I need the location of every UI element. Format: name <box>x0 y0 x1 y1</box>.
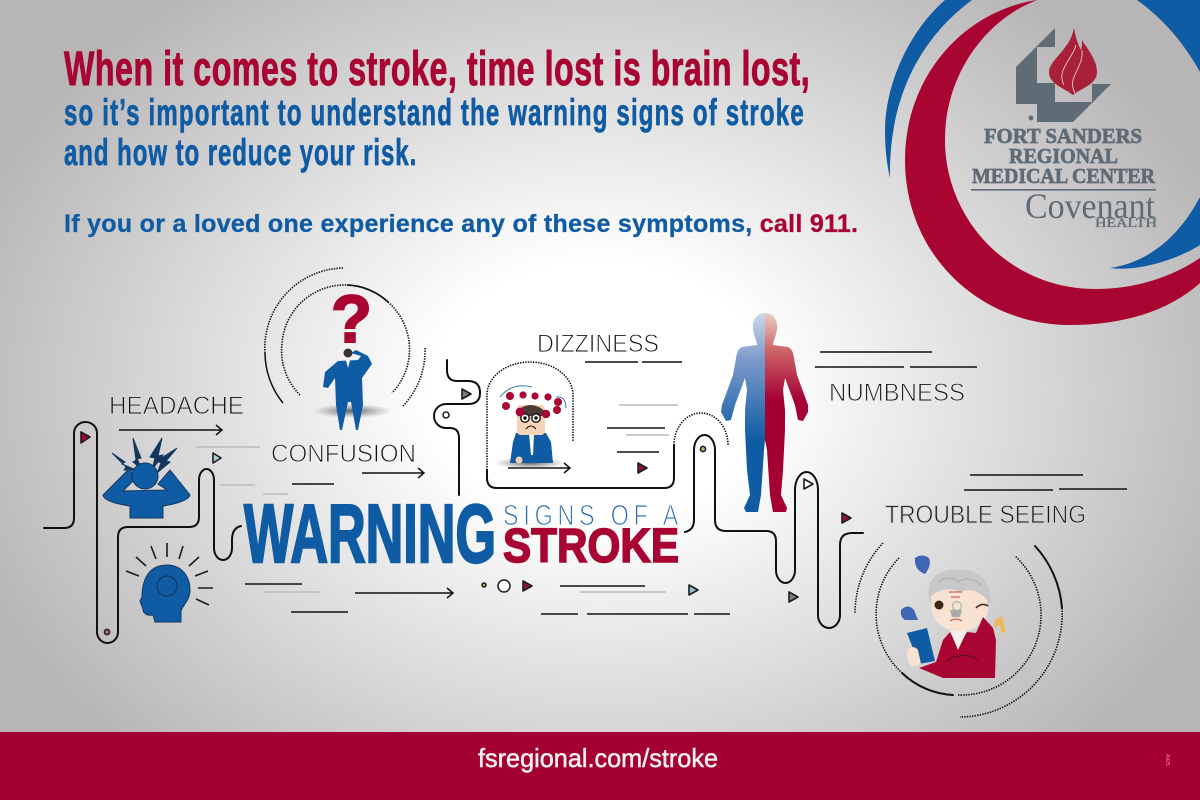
decorative arrows <box>119 425 570 598</box>
arrow: headache <box>119 425 222 435</box>
connecting line: left route <box>44 422 241 643</box>
icon: half blue half red body <box>721 313 808 512</box>
arrow: confusion <box>362 468 424 478</box>
star ring <box>502 391 562 418</box>
icon: question mark: ? <box>331 282 372 357</box>
label: dizziness: DIZZINESS <box>537 330 659 358</box>
logo text: Covenant: Covenant <box>1025 186 1155 226</box>
connecting line: dizziness dome <box>487 362 728 488</box>
icon: head with radiating lines <box>126 543 213 622</box>
logo text: Regional: REGIONAL <box>1009 144 1118 168</box>
head <box>517 405 545 435</box>
label: confusion: CONFUSION <box>271 440 416 468</box>
hand <box>907 647 921 667</box>
title: warning: WARNING <box>244 487 496 580</box>
icon: person with headache <box>103 438 190 518</box>
label: numbness: NUMBNESS <box>829 379 965 407</box>
logo swoosh: blue top right <box>1137 0 1200 72</box>
logo swoosh: blue lower right <box>1110 197 1200 269</box>
label: headache: HEADACHE <box>109 392 244 420</box>
logo text: Medical Center: MEDICAL CENTER <box>972 164 1156 188</box>
icon: dizzy man <box>494 386 566 469</box>
arcs around confused man <box>265 268 425 406</box>
triangle markers <box>81 389 851 602</box>
logo swoosh: blue left crescent <box>885 0 972 178</box>
footer code: A925 <box>1164 754 1170 766</box>
hospital logo <box>971 28 1157 230</box>
lightning bolts <box>112 438 177 473</box>
heading line 2: so it’s important to understand the warning signs of stroke <box>64 92 804 133</box>
jacket <box>919 617 996 678</box>
worry marks <box>901 556 930 620</box>
logo text: Health: HEALTH <box>1095 215 1157 230</box>
phone <box>907 628 935 664</box>
arrow: centre <box>355 588 453 598</box>
logo swoosh: red crescent <box>905 0 1200 325</box>
hair <box>928 570 990 612</box>
body <box>510 433 553 463</box>
icon: older person squinting at phone <box>901 556 1006 678</box>
arcs around trouble seeing figure <box>855 543 1062 717</box>
heading line 3: and how to reduce your risk. <box>64 132 416 173</box>
footer url: fsregional.com/stroke <box>478 743 718 773</box>
connecting line: right route <box>685 435 863 628</box>
title: stroke: STROKE <box>503 520 679 573</box>
logo mark: flame <box>1049 28 1097 95</box>
logo mark: dot <box>1029 116 1033 120</box>
heading line 1: When it comes to stroke, time lost is brain lost, <box>64 42 810 96</box>
icon: confused man <box>312 348 392 430</box>
label: trouble seeing: TROUBLE SEEING <box>885 501 1086 529</box>
node circles <box>104 412 706 635</box>
title: signs of a: SIGNS OF A <box>503 498 679 532</box>
call to action line: If you or a loved one experience any of these symptoms, call 911. <box>64 210 858 238</box>
face <box>931 589 988 632</box>
connecting line: centre route <box>434 360 480 495</box>
logo text: Fort Sanders: FORT SANDERS <box>984 124 1142 148</box>
arrow: dizziness <box>508 463 570 473</box>
footer band <box>0 732 1200 800</box>
logo mark: grey building <box>1016 28 1111 122</box>
